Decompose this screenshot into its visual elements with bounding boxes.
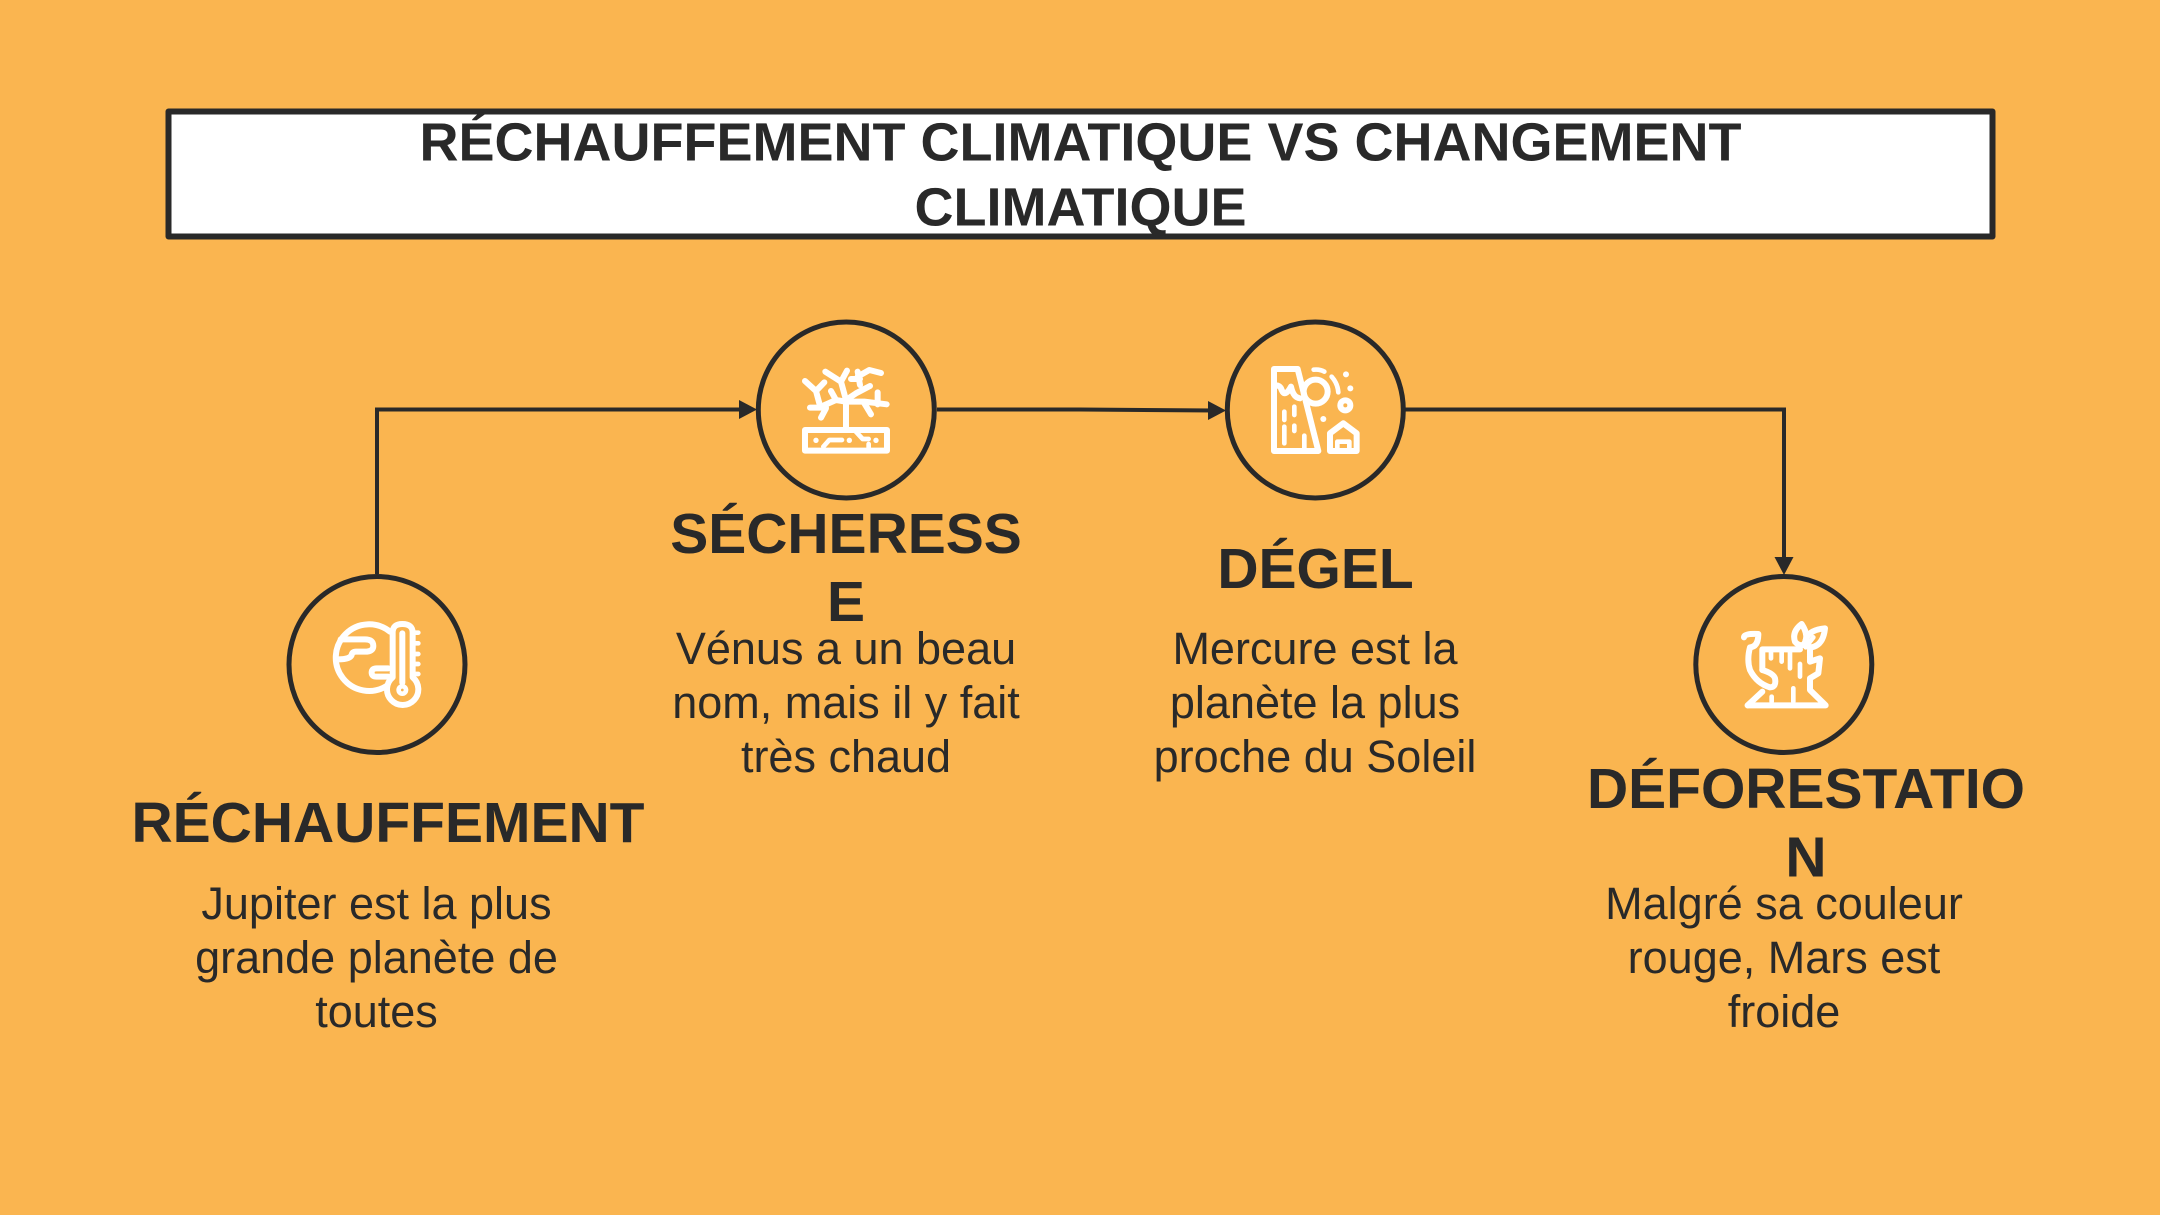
description: planète la plus [1170, 677, 1460, 728]
heading: N [1785, 826, 1827, 890]
step: déforestation [1587, 576, 2025, 1037]
heading: DÉFORESTATIO [1587, 757, 2025, 821]
description [1605, 878, 1963, 1037]
circle with globe and thermometer icon [289, 576, 465, 752]
circle with dead tree icon [758, 322, 934, 498]
title banner [168, 112, 1992, 238]
description: toutes [315, 986, 438, 1037]
description: grande planète de [195, 932, 558, 983]
step: sécheresse [670, 322, 1022, 782]
step: réchauffement [132, 576, 645, 1037]
arrow: dégel to déforestation [1405, 410, 1794, 575]
circle with tree stump icon [1696, 576, 1872, 752]
arrow: sécheresse to dégel [937, 401, 1226, 420]
description: rouge, Mars est [1628, 932, 1941, 983]
heading: DÉGEL [1217, 537, 1414, 601]
heading: E [827, 570, 865, 634]
description: Malgré sa couleur [1605, 878, 1963, 929]
title banner: CLIMATIQUE [915, 178, 1246, 238]
description: Mercure est la [1172, 623, 1459, 674]
description: proche du Soleil [1154, 731, 1476, 782]
step: dégel [1154, 322, 1476, 782]
description: Jupiter est la plus [201, 878, 552, 929]
title banner: RÉCHAUFFEMENT CLIMATIQUE VS CHANGEMENT [420, 112, 1741, 172]
description [1154, 623, 1476, 782]
circle with melting cliff icon [1227, 322, 1403, 498]
description: Vénus a un beau [676, 623, 1016, 674]
arrow: réchauffement to sécheresse [377, 400, 757, 574]
description [195, 878, 558, 1037]
description: froide [1728, 986, 1840, 1037]
description [672, 623, 1020, 782]
heading: RÉCHAUFFEMENT [132, 791, 645, 855]
description: très chaud [741, 731, 951, 782]
heading [670, 502, 1022, 634]
description: nom, mais il y fait [672, 677, 1020, 728]
heading: SÉCHERESS [670, 502, 1022, 566]
heading [1587, 757, 2025, 890]
